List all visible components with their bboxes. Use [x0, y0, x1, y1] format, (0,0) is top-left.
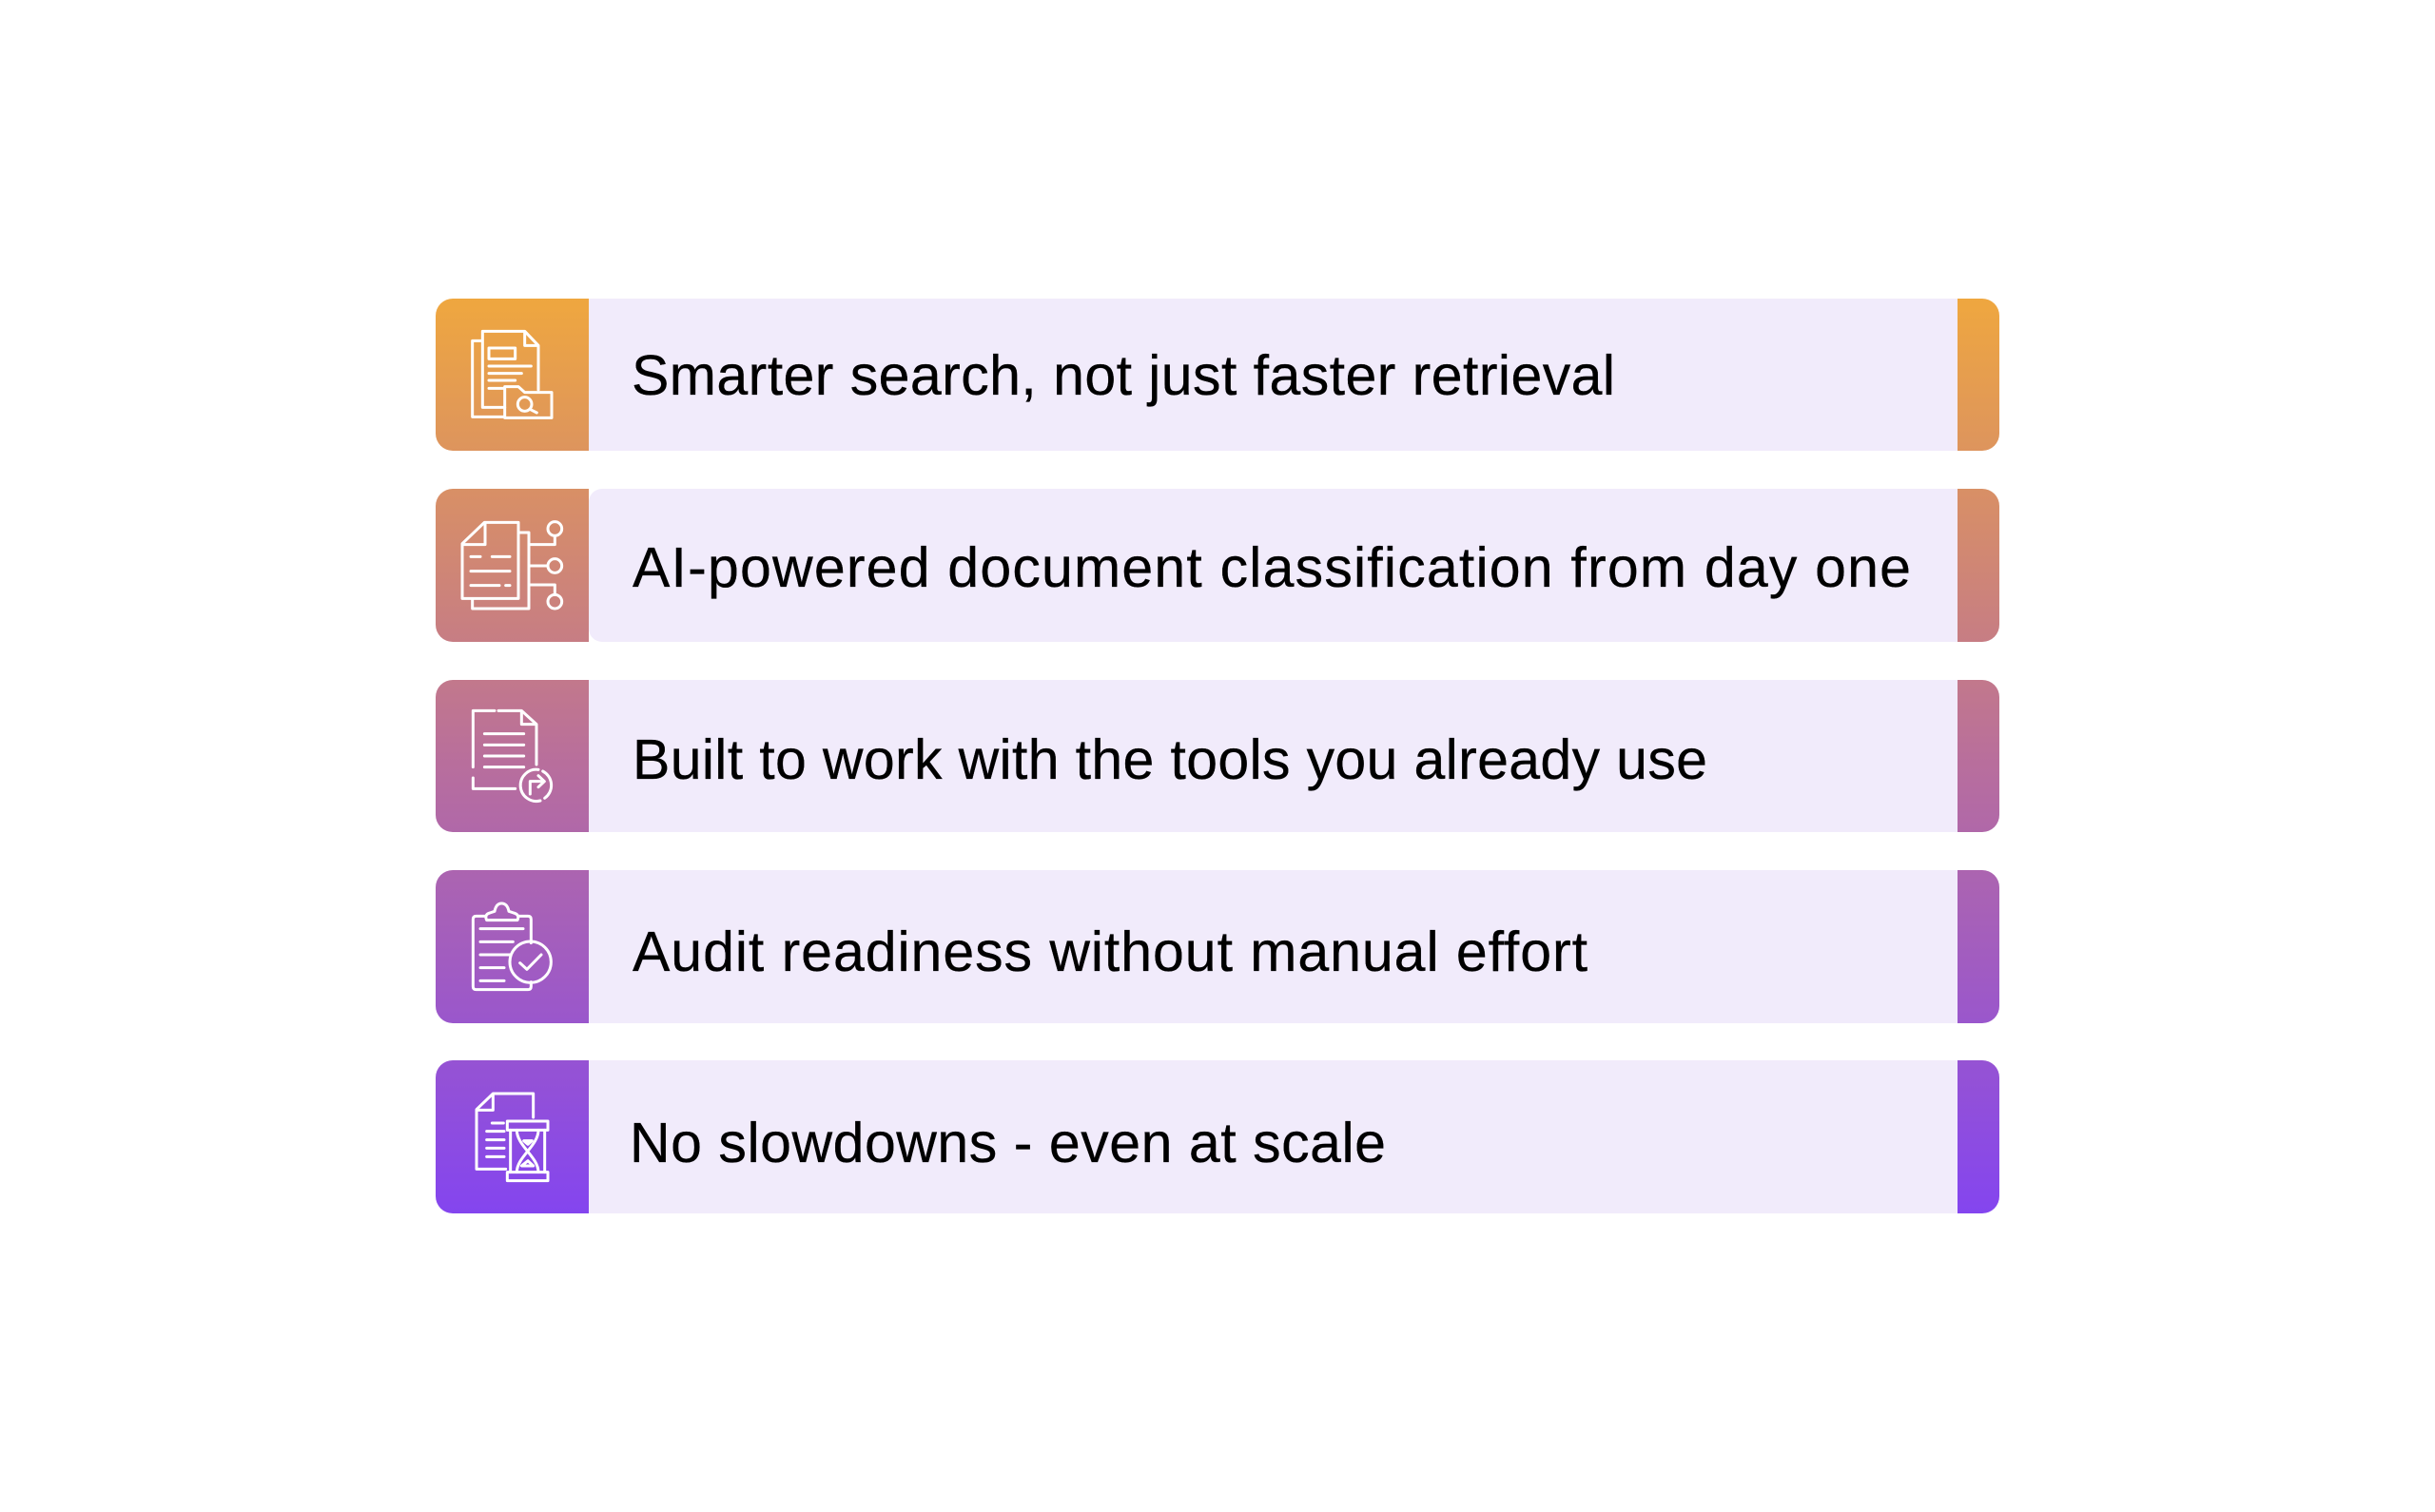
row 1 right accent tab	[1958, 299, 1999, 451]
row 4 text: Audit readiness without manual effort	[633, 921, 1588, 983]
row 3 left icon block	[436, 680, 589, 832]
row 5 body panel	[589, 1060, 1958, 1213]
row 2: document classification	[436, 489, 1999, 642]
row 2 right accent tab	[1958, 489, 1999, 642]
row 4 left icon block	[436, 870, 589, 1023]
row 2 left icon block	[436, 489, 589, 642]
row 2 body panel	[589, 489, 1958, 642]
row 5 right accent tab	[1958, 1060, 1999, 1213]
row 3 right accent tab	[1958, 680, 1999, 832]
row 4 right accent tab	[1958, 870, 1999, 1023]
row 1 body panel	[589, 299, 1958, 451]
row 4 body panel	[589, 870, 1958, 1023]
row 5 left icon block	[436, 1060, 589, 1213]
icon: document with folder search	[473, 331, 552, 417]
row 1 text: Smarter search, not just faster retrieval	[632, 344, 1615, 407]
icon: document classification tree	[462, 522, 562, 609]
icon: document with redirect arrow	[473, 710, 552, 802]
row 3: works with existing tools	[436, 680, 1999, 832]
row 5 text: No slowdowns - even at scale	[630, 1112, 1386, 1174]
row 1: smarter search	[436, 299, 1999, 451]
row 5: no slowdowns	[436, 1060, 1999, 1213]
icon: clipboard with check mark	[473, 903, 551, 990]
icon: document with hourglass	[477, 1094, 548, 1181]
row 3 text: Built to work with the tools you already use	[633, 728, 1707, 791]
row 3 body panel	[589, 680, 1958, 832]
row 4: audit readiness	[436, 870, 1999, 1023]
row 1 left icon block	[436, 299, 589, 451]
row 2 text: AI-powered document classification from day one	[633, 536, 1911, 599]
